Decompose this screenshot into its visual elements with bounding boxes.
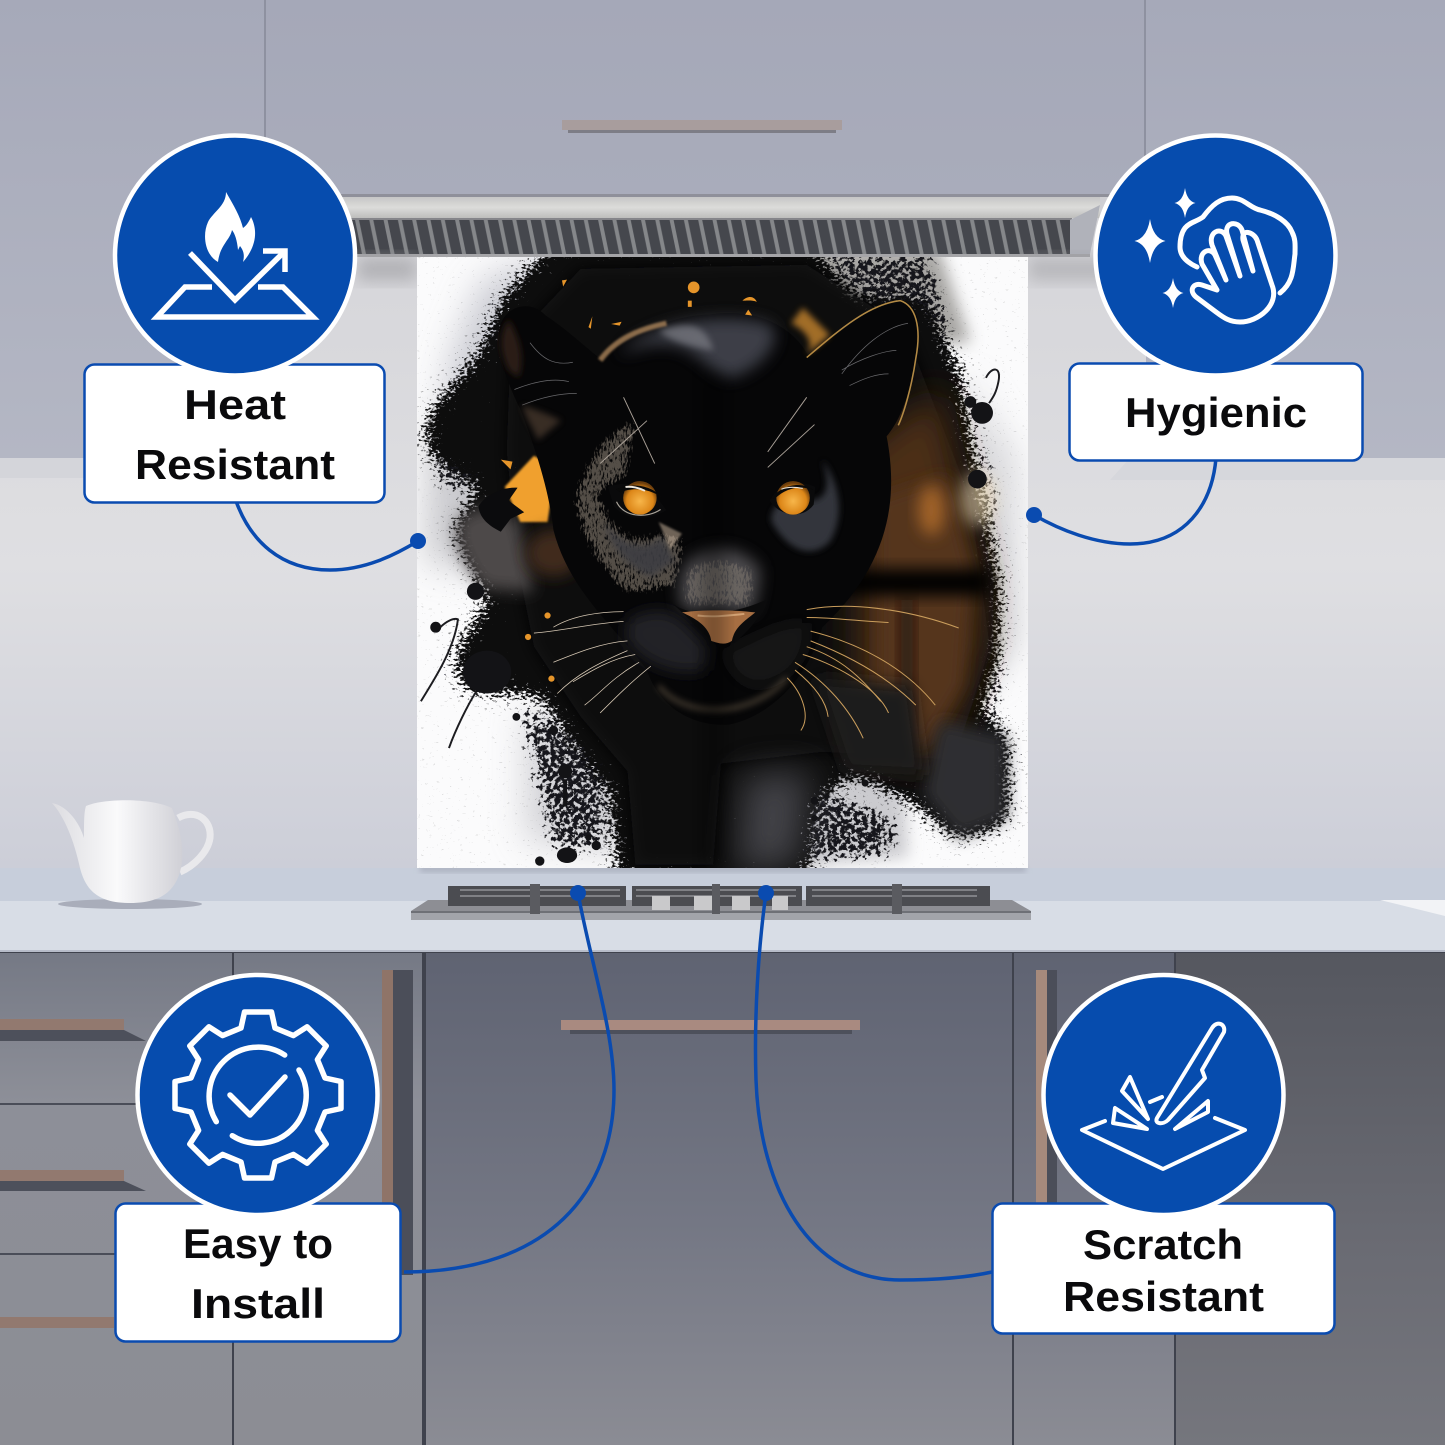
muzzle — [679, 549, 760, 612]
label: scratch resistant: Scratch — [1083, 1221, 1243, 1268]
label: scratch resistant: Resistant — [1063, 1273, 1264, 1320]
speckled ink edges — [429, 245, 1009, 869]
badge: heat resistant — [115, 136, 355, 376]
label: hygienic: Hygienic — [1125, 389, 1307, 436]
paint wash — [425, 249, 1021, 873]
connector: heat resistant — [236, 501, 426, 570]
orange and grey left patch — [456, 456, 581, 592]
head — [499, 300, 959, 738]
badge: scratch resistant — [1044, 975, 1284, 1215]
label: hygienic — [1070, 364, 1362, 460]
badge: easy to install — [138, 975, 378, 1215]
icon: gear with check — [175, 1012, 341, 1178]
whiskers — [534, 606, 959, 738]
cheek fur — [573, 417, 686, 596]
nose — [674, 602, 762, 618]
right eye — [774, 498, 814, 514]
left eye — [609, 486, 610, 488]
forehead highlight — [620, 318, 775, 378]
brown right wash — [814, 389, 1005, 838]
connector: easy to install — [404, 885, 614, 1272]
glass reflection folds — [701, 374, 725, 865]
label: heat resistant: Resistant — [135, 441, 335, 488]
label: easy to install: Install — [191, 1280, 325, 1327]
connector: hygienic — [1026, 458, 1216, 544]
badge: hygienic — [1096, 136, 1336, 376]
label: heat resistant: Heat — [184, 381, 286, 428]
label: scratch resistant — [992, 1204, 1334, 1334]
label: heat resistant — [84, 364, 384, 502]
icon: hand wiping with sparkles — [1134, 188, 1295, 322]
ear details — [501, 319, 522, 378]
label: easy to install: Easy to — [183, 1220, 333, 1267]
icon: flame over surface — [157, 192, 313, 317]
panther glass panel — [417, 245, 1028, 881]
icon: knife scratching surface — [1082, 1024, 1245, 1169]
teapot — [52, 800, 210, 909]
ink splash — [429, 245, 1005, 881]
splatter and flecks — [421, 280, 999, 866]
label: easy to install — [116, 1204, 400, 1342]
hob — [411, 884, 1031, 920]
connector: scratch resistant — [755, 885, 992, 1280]
